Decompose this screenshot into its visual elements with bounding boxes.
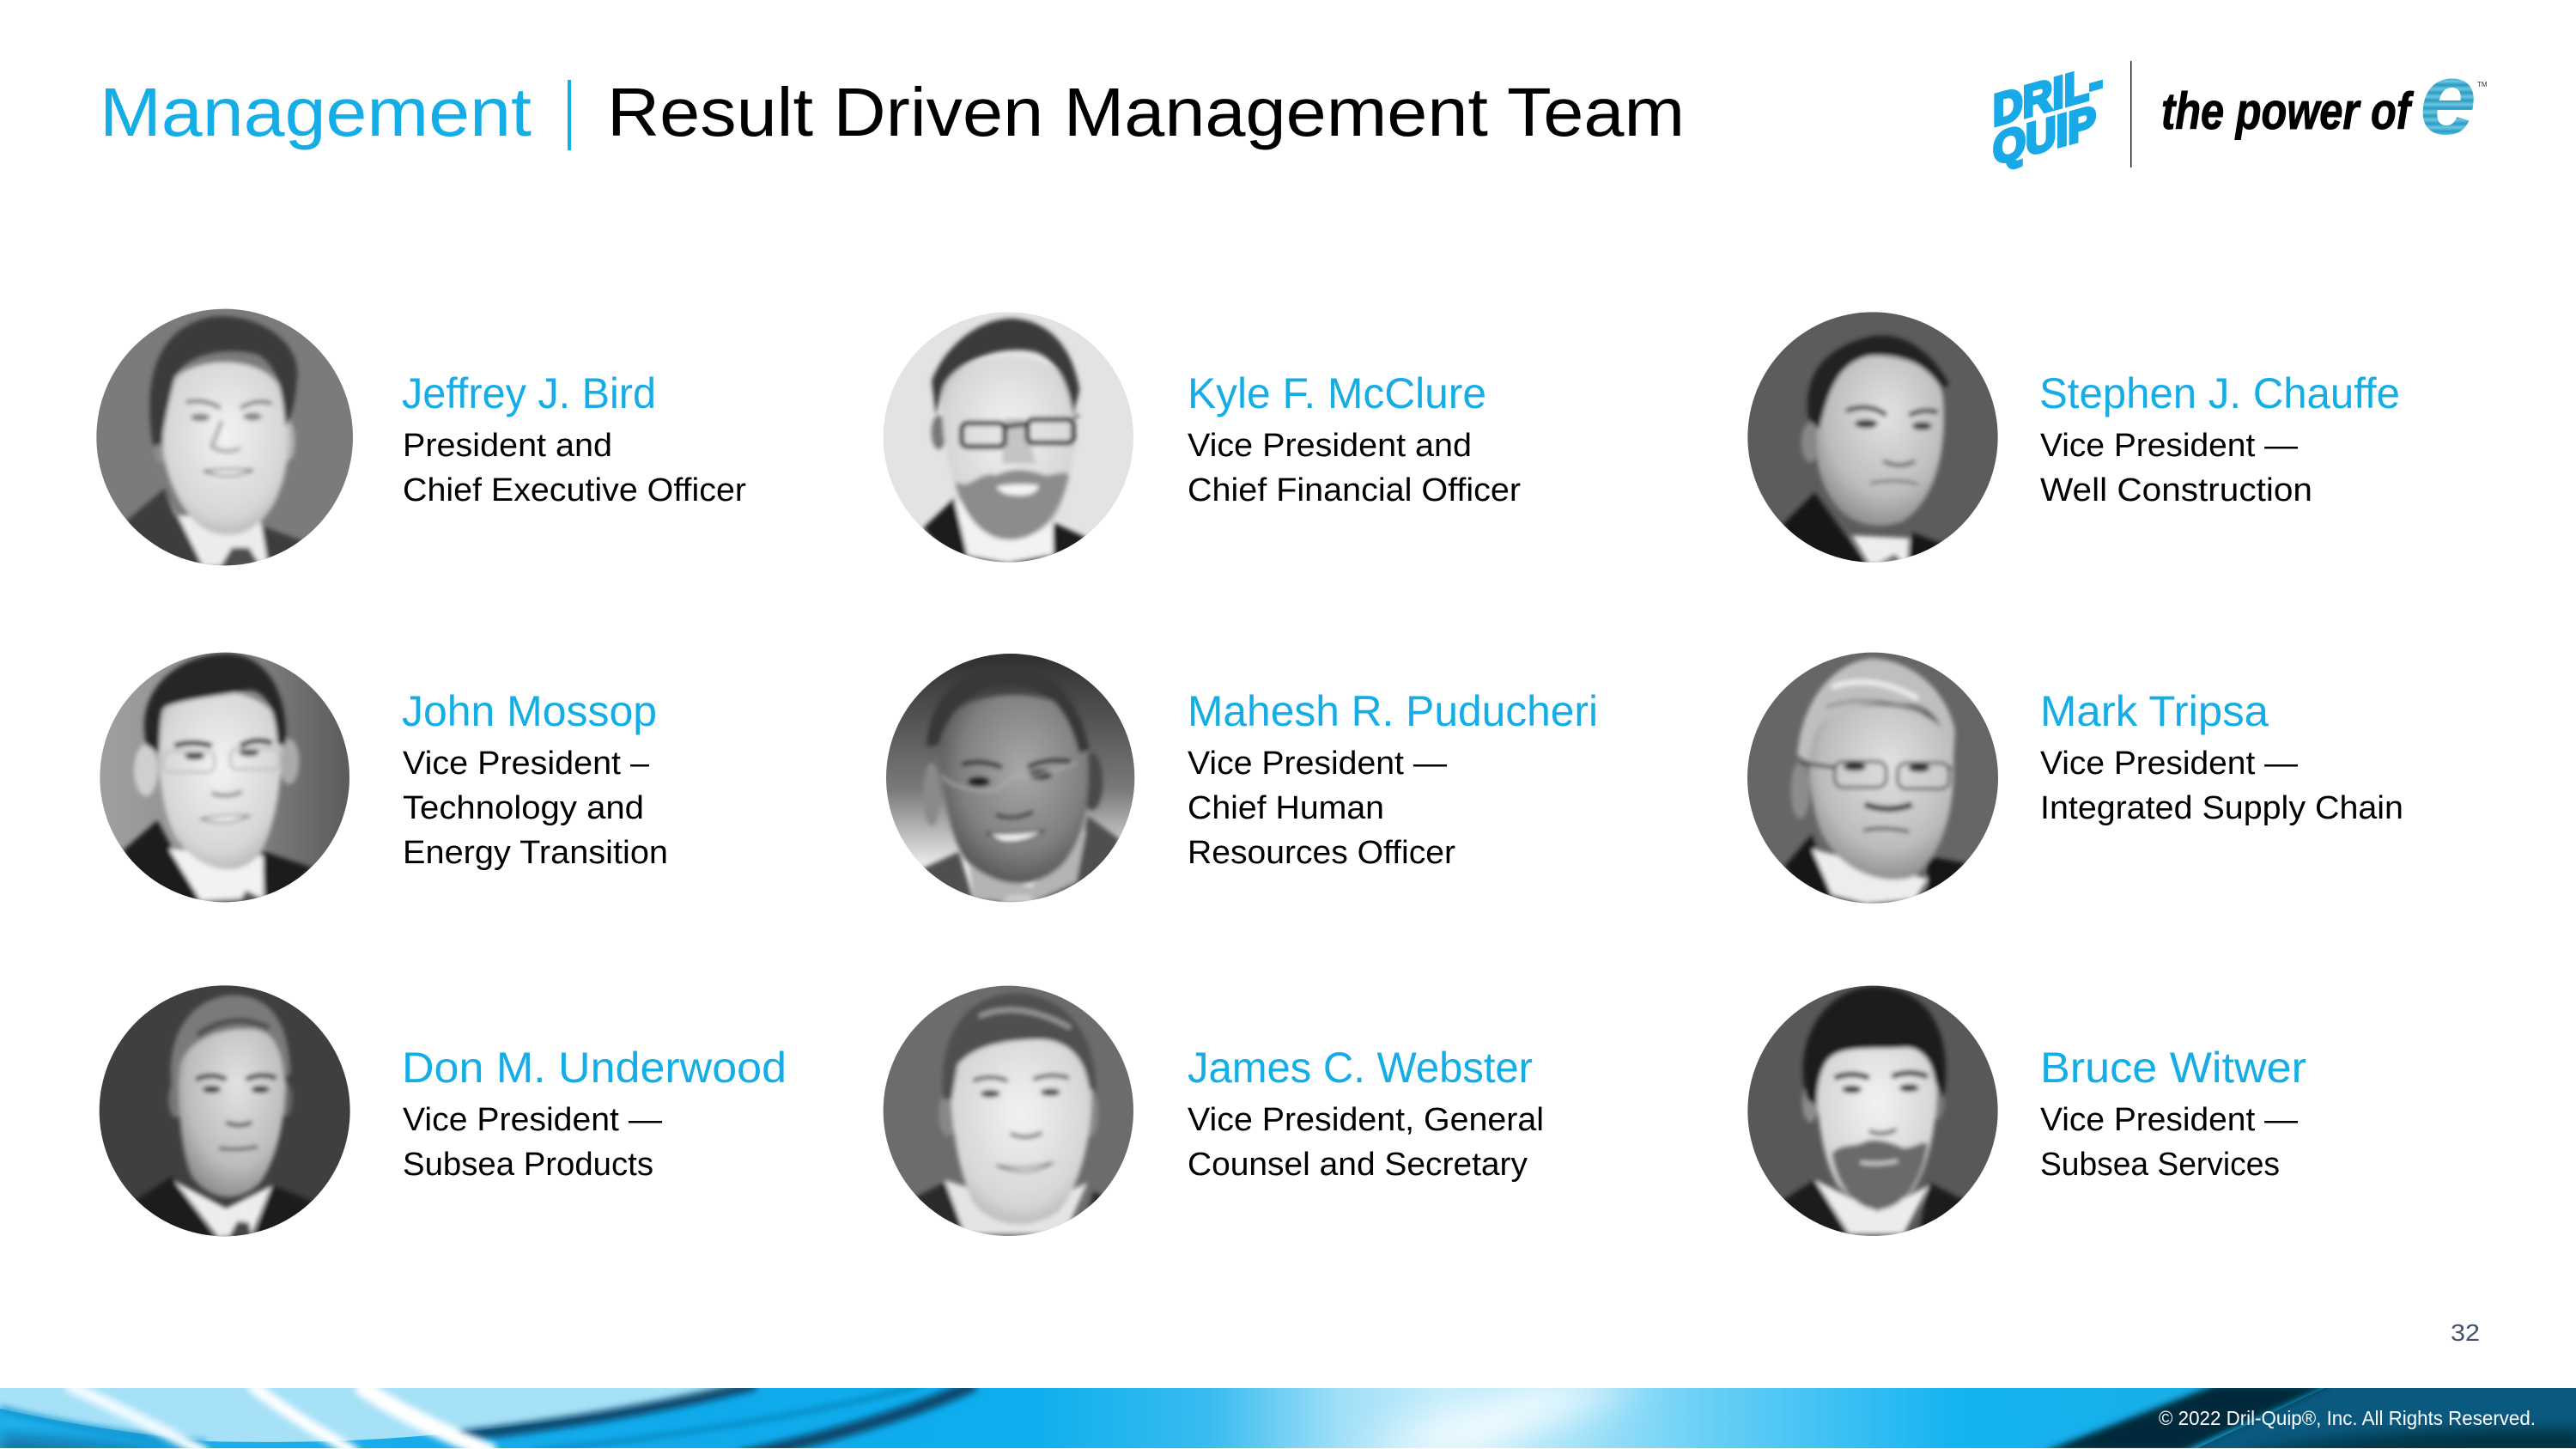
role: Counsel and Secretary (1188, 1147, 1528, 1183)
title (100, 74, 1685, 150)
role (1188, 746, 1455, 871)
dark diagonal band on the right (2197, 1388, 2576, 1448)
role: Chief Executive Officer (403, 472, 746, 508)
team member: Bruce Witwer (1746, 985, 2306, 1245)
role: Resources Officer (1188, 835, 1455, 871)
team member: John Mossop (97, 650, 668, 910)
page number: 32 (2451, 1319, 2480, 1346)
name: Stephen J. Chauffe (2039, 369, 2400, 417)
icon: Dril-Quip wordmark (1993, 56, 2103, 175)
team member: Mark Tripsa (1746, 651, 2403, 910)
title: Management (100, 74, 532, 150)
name: John Mossop (402, 687, 657, 735)
role (403, 746, 668, 871)
icon: Dril-Quip wordmark: QUIP (1993, 96, 2096, 175)
role (2040, 746, 2403, 826)
role: Vice President — (2040, 746, 2298, 782)
light upper-left sweep (0, 1388, 747, 1442)
role: Chief Human (1188, 790, 1384, 826)
role (1188, 1102, 1544, 1183)
role: Vice President — (1188, 746, 1447, 782)
role (403, 1102, 662, 1183)
role: Well Construction (2040, 472, 2312, 508)
team member: Stephen J. Chauffe (1746, 309, 2400, 573)
photo: Mark Tripsa (1746, 651, 2001, 910)
title: Result Driven Management Team (607, 74, 1685, 150)
name: Mahesh R. Puducheri (1188, 687, 1598, 735)
role: Subsea Products (403, 1147, 653, 1183)
role (2040, 1102, 2298, 1183)
team member: Jeffrey J. Bird (94, 307, 746, 578)
tagline: the power of: the power of (2161, 82, 2414, 140)
role: President and (403, 428, 612, 464)
footer banner (0, 1388, 2576, 1448)
white diagonal streaks (67, 1385, 206, 1449)
role: Vice President and (1188, 428, 1472, 464)
photo: Bruce Witwer (1746, 985, 2001, 1245)
photo: Don M. Underwood (97, 983, 352, 1243)
role: Vice President — (2040, 428, 2298, 464)
photo: Mahesh R. Puducheri (884, 651, 1136, 910)
role: Vice President, General (1188, 1102, 1544, 1138)
team member: Kyle F. McClure (882, 309, 1521, 567)
team member: Mahesh R. Puducheri (884, 651, 1598, 910)
role: Chief Financial Officer (1188, 472, 1521, 508)
photo: Jeffrey J. Bird (94, 307, 358, 578)
name: Bruce Witwer (2040, 1044, 2306, 1092)
photo: Kyle F. McClure (882, 309, 1136, 567)
photo: Stephen J. Chauffe (1746, 309, 2001, 573)
role: Vice President — (2040, 1102, 2298, 1138)
logo: Dril-Quip and the power of e: TM (2477, 81, 2488, 88)
role: Integrated Supply Chain (2040, 790, 2403, 826)
logo: Dril-Quip and the power of e (1993, 41, 2488, 175)
icon: Dril-Quip wordmark: DRIL- (1993, 56, 2103, 137)
role: Energy Transition (403, 835, 668, 871)
role: Technology and (403, 790, 644, 826)
team member: Don M. Underwood (97, 983, 787, 1243)
name: Kyle F. McClure (1188, 369, 1486, 417)
copyright: © 2022 Dril-Quip®, Inc. All Rights Reserved. (2159, 1407, 2536, 1429)
team member: James C. Webster (882, 983, 1544, 1245)
role: Vice President — (403, 1102, 662, 1138)
name: Jeffrey J. Bird (402, 369, 656, 417)
role (1188, 428, 1521, 508)
role (2040, 428, 2312, 508)
name: Mark Tripsa (2040, 687, 2269, 735)
name: James C. Webster (1188, 1044, 1533, 1092)
icon: striped e: e (2420, 41, 2476, 156)
diagonal white highlight (1359, 1388, 1645, 1448)
photo: John Mossop (97, 650, 352, 910)
role: Vice President – (403, 746, 650, 782)
photo: James C. Webster (882, 983, 1136, 1245)
role (403, 428, 746, 508)
role: Subsea Services (2040, 1147, 2280, 1183)
name: Don M. Underwood (402, 1044, 787, 1092)
